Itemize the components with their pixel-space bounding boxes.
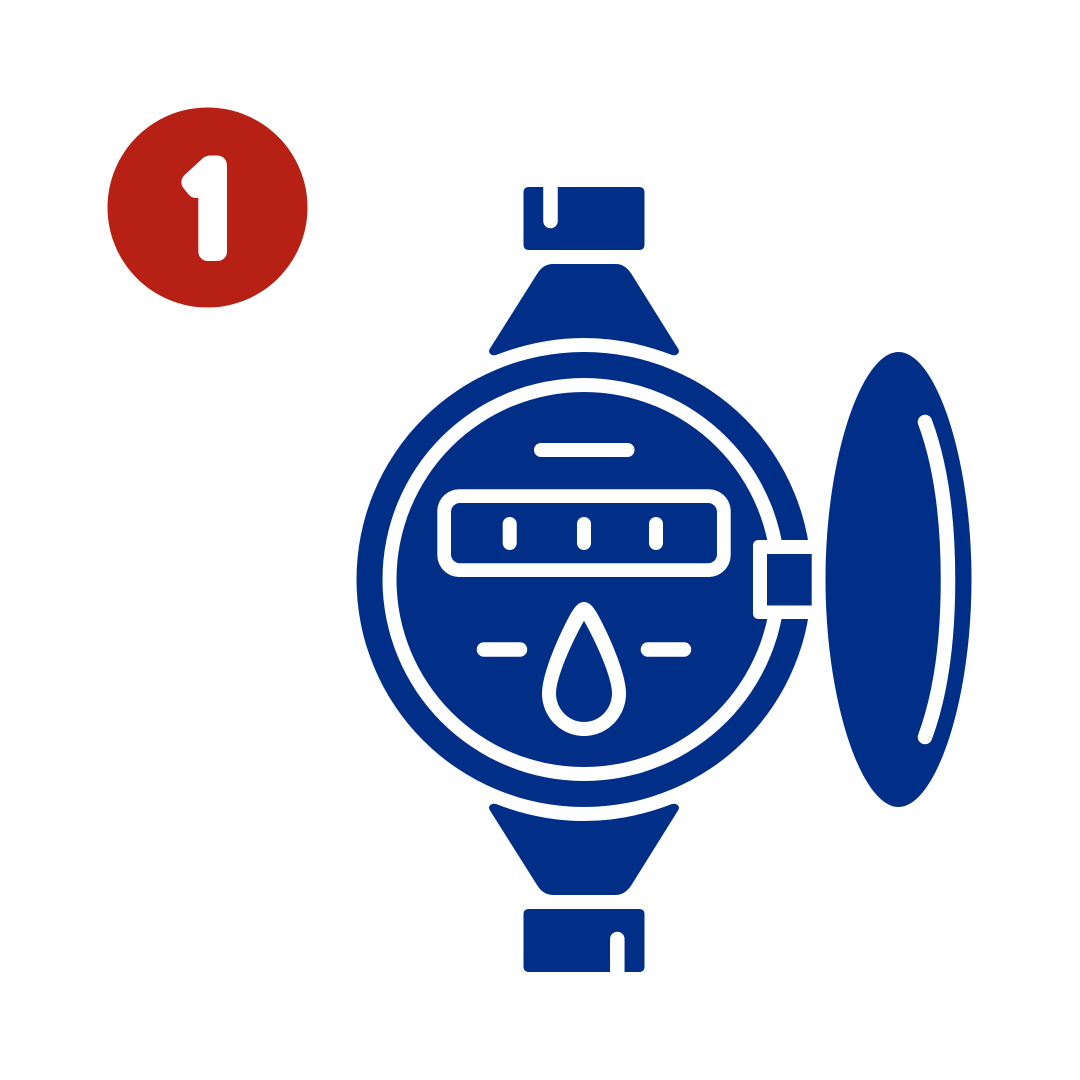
water drop bbox=[556, 621, 612, 722]
display window frame bbox=[437, 489, 731, 577]
white ring gap bbox=[382, 378, 786, 781]
water drop outline bbox=[542, 602, 626, 736]
bottom connector cap bbox=[524, 909, 644, 972]
reading bar bbox=[534, 443, 634, 457]
top connector slot bbox=[543, 180, 558, 221]
side disc highlight bbox=[925, 422, 948, 737]
side connector frame bbox=[753, 540, 826, 619]
bottom connector slot bbox=[610, 939, 625, 980]
side connector bbox=[767, 554, 812, 606]
badge: step number 1 bbox=[108, 108, 308, 308]
top funnel bbox=[489, 264, 679, 355]
badge number: 1 bbox=[174, 154, 246, 270]
digit 2 bbox=[577, 517, 591, 550]
icon: water meter bbox=[356, 180, 972, 980]
bottom funnel bbox=[489, 804, 679, 895]
side disc bbox=[826, 352, 972, 807]
dial face bbox=[396, 392, 772, 767]
right dash bbox=[641, 642, 691, 657]
digit 1 bbox=[503, 517, 517, 550]
display window bbox=[451, 503, 717, 563]
left dash bbox=[477, 642, 527, 657]
outer dial ring bbox=[356, 352, 812, 807]
top connector cap bbox=[524, 187, 644, 250]
digit 3 bbox=[649, 517, 663, 550]
